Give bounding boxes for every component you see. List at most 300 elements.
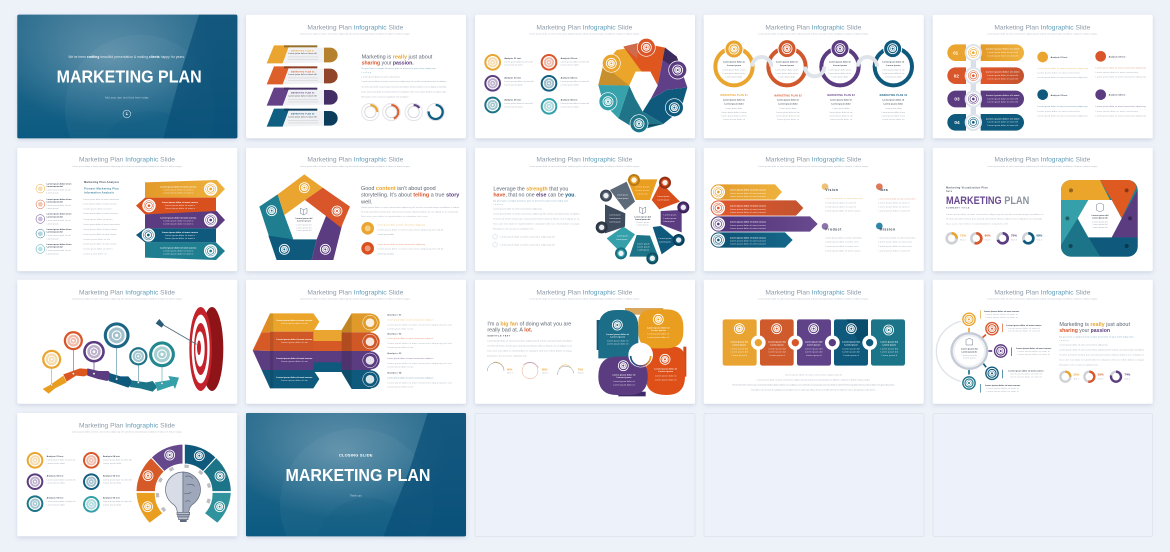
progress rings xyxy=(362,103,444,121)
slide 13 subtitle: Lorem ipsum dolor sit amet consectetur adipiscing elit sed do eiusmod tempor incididunt ut labore et dolore magna xyxy=(529,298,640,301)
slide 12 text list: Lorem ipsum dolor sit am xyxy=(387,327,414,330)
plan captions: Lorem ipsum dolor sit xyxy=(830,99,852,102)
pill 02: Lorem ipsum dolor sit amet elit xyxy=(987,74,1018,77)
slide 2 text block: Duis aute irure dolor in reprehenderit in voluptate velit esse cillum dolore eu fugiat nulla xyxy=(362,90,447,93)
slide 2 text block: Ut enim ad minim veniam quis nostrud exercitation ullamco laboris nisi ut aliquip commodo xyxy=(362,85,447,88)
pill 02: Lorem ipsum dolor sit amet elit xyxy=(987,77,1018,80)
slide 8 body: Ut enim ad minim veniam quis nostrud exercitation ullamco laboris nisi ut aliquip ex ea xyxy=(493,217,580,220)
ribbon 2 xyxy=(267,66,338,84)
pill 02: Lorem ipsum dolor sit amet xyxy=(986,71,1020,74)
middle text column: Marketing Plan Analysis xyxy=(84,180,120,184)
slide 13 body: Duis aute irure dolor in reprehenderit in voluptate velit esse cillum dolore eu fugiat xyxy=(487,349,572,352)
middle text column: Lorem ipsum dolor sit amet e xyxy=(83,247,113,250)
radial diagram xyxy=(936,312,1008,391)
slide 7 body: Duis aute irure dolor in reprehenderit in voluptate velit esse xyxy=(361,215,428,218)
plan captions: Lorem ipsum dolor sit amet xyxy=(721,115,747,118)
stacked arrows: Lorem ipsum dolor sit amet consec xyxy=(160,186,197,189)
slide 15 body: Lorem ipsum dolor sit amet consectetur adipiscing elit sed do eiusmod tempor incididunt xyxy=(1059,348,1144,351)
donut labels: Text 4 xyxy=(1036,238,1043,241)
donut labels: 68% xyxy=(1036,234,1043,238)
middle text column: Lorem ipsum dolor sit amet consec xyxy=(83,228,117,231)
plan captions: Lorem ipsum dolor sit am xyxy=(882,111,905,114)
ring inner text: Lorem ipsum dolor sit am xyxy=(723,69,746,72)
segmented wheel diagram: Lorem ipsum xyxy=(664,217,677,220)
left icon list: Lorem ipsum dolor sit am xyxy=(47,204,71,207)
segmented wheel diagram: Lorem ipsum xyxy=(636,221,650,224)
analysis items: Lorem ipsum dolor sit amet consectetur adipiscing xyxy=(1096,75,1146,78)
stacked arrows xyxy=(136,180,225,260)
slide 15 body: today xyxy=(1059,339,1070,342)
analysis list: Lorem ipsum dolor xyxy=(561,64,579,67)
vision, idea, product, mission: Lorem ipsum dolor sit amet cons xyxy=(825,245,859,248)
cards: Lorem ipsum xyxy=(883,344,896,346)
segmented wheel diagram: Lorem ip xyxy=(637,192,648,195)
slide 14: five cards xyxy=(704,280,924,404)
stacked arrows: Lorem ipsum dolor sit amet e xyxy=(163,189,194,192)
analysis list: Analysis 05 text xyxy=(103,475,120,478)
donut labels: Text 1 xyxy=(960,238,966,241)
plan captions: Lorem ipsum dolor sit am xyxy=(829,115,853,118)
cards: Lorem ipsum d xyxy=(882,354,898,357)
quad blobs: Lorem ipsum dolor sit xyxy=(607,343,629,346)
middle text column: Lorem ipsum dolor sit amet consectetur xyxy=(83,198,120,201)
plan captions: Lorem ipsum dolor sit xyxy=(777,99,799,102)
arrows: Lorem ipsum dolor sit amet consect xyxy=(730,243,766,246)
slide 13 body: Ut enim ad minim veniam quis nostrud exercitation ullamco laboris nisi ut aliquip ex ea xyxy=(487,344,573,347)
centered paragraph: Ut enim ad minim veniam quis nostrud exercitation ullamco laboris nisi ut aliquip ex ea commodo consequat duis aute irure dolor in reprehenderit in voluptate velit esse cillum dolore eu fugiat nulla pariatur xyxy=(732,383,895,386)
plan captions: MARKETING PLAN 04 xyxy=(880,94,908,97)
left icon list: Lorem ipsum xyxy=(47,237,59,240)
ribbon 4: Lorem ipsum dolor sit amet elit xyxy=(288,115,317,118)
slide 8 heading: have, that no one else can be you. xyxy=(493,192,576,198)
middle text column: Pioneer Marketing Plan xyxy=(84,186,119,190)
slide 2 heading line 2: sharing your passion. xyxy=(362,60,414,66)
cards: Lorem ipsum dol xyxy=(842,342,860,344)
plan captions: Lorem ipsum dolor sit xyxy=(723,118,745,121)
vision, idea, product, mission: Lorem ipsum dolor sit amet el xyxy=(879,210,911,213)
cards: Lorem ipsum d xyxy=(843,354,859,357)
radial diagram: Lorem ipsum do xyxy=(962,354,978,357)
rounded hexagon diagram: Lorem ipsum do xyxy=(1092,218,1108,220)
plan captions: Lorem ipsum dolor sit xyxy=(830,118,852,121)
arrows: Lorem ipsum dolor sit amet consect xyxy=(730,208,766,211)
segmented wheel diagram: Lorem ipsum xyxy=(657,198,670,201)
stacked arrows: Lorem ipsum dolor sit amet consec xyxy=(162,201,199,204)
ribbon 3 xyxy=(267,88,338,106)
slide 15 heading xyxy=(1059,322,1130,334)
segmented wheel diagram xyxy=(597,175,688,263)
pinwheel diagram xyxy=(598,38,687,133)
ribbon 3: Lorem ipsum dolor sit amet elit xyxy=(288,94,317,97)
cards: Lorem ipsum dol xyxy=(842,351,860,354)
slide 12 text list: Analysis 04 xyxy=(387,372,402,375)
slide 13 heading: I'm a big fan of doing what you are xyxy=(487,322,571,328)
rounded hexagon diagram xyxy=(1061,180,1138,257)
bullseye target xyxy=(189,307,223,391)
cards: Lorem ipsum d xyxy=(769,354,785,357)
slide 15 donuts: Text 2 xyxy=(1098,377,1104,380)
slide 8 bullets: Lorem ipsum dolor sit amet consectetur adipiscing elit xyxy=(501,235,555,238)
vision, idea, product, mission: Lorem ipsum dolor sit amet el xyxy=(879,249,911,252)
gear segments xyxy=(136,444,231,523)
left icon list: Lorem ipsum dolor sit am xyxy=(47,213,71,216)
slide 11: arrow path and target xyxy=(17,280,237,404)
arrows: Lorem ipsum dolor sit amet consect xyxy=(730,195,766,198)
pill 04: 04 xyxy=(954,120,960,125)
slide 12 text list: Lorem ipsum dolor sit amet consectetur adipiscin xyxy=(387,318,434,321)
donut labels: Text 3 xyxy=(1011,238,1017,241)
slide 12 text list: Lorem ipsum dolor sit am xyxy=(387,346,414,349)
pill 04: Lorem ipsum dolor sit amet xyxy=(986,117,1020,120)
left icon list: Lorem ipsum xyxy=(47,252,59,255)
left icon list: Lorem ipsum dolor sit am xyxy=(47,219,71,222)
slide 11 title: Marketing Plan Infographic Slide xyxy=(79,289,175,296)
cards: Lorem ipsum dol xyxy=(731,342,748,344)
segmented wheel diagram: Lorem ipsum xyxy=(659,240,671,243)
vision, idea, product, mission: Lorem ipsum dolor sit amet el xyxy=(879,202,910,205)
slide 16 subtitle: Lorem ipsum dolor sit amet consectetur adipiscing elit sed do eiusmod tempor incididunt ut labore et dolore magna xyxy=(72,431,183,434)
ribbon 2: MARKETING PLAN 02 xyxy=(291,70,314,73)
middle text column: Lorem ipsum dolor sit amet consect xyxy=(83,203,117,206)
segmented wheel diagram: Lorem ipsum xyxy=(637,246,650,249)
plan captions: Lorem ipsum dolor sit am xyxy=(776,111,800,114)
plan captions: Lorem ipsum dolor xyxy=(831,104,851,106)
left icon list: Lorem ipsum dolor sit am xyxy=(47,188,71,191)
slide 13 body xyxy=(487,339,573,357)
analysis list: Lorem ipsum dolor sit amet elit xyxy=(103,500,132,503)
slide 15 body: Do you have a unique business plan to present to your team today now xyxy=(1059,335,1134,338)
left block: Lorem ipsum dolor sit amet consec xyxy=(276,319,313,322)
dart arrow xyxy=(156,319,197,344)
donut labels xyxy=(960,234,1043,241)
slide 7 callouts: Lorem ipsum dolor sit amet consectetur adipiscing elit sed do xyxy=(377,248,444,251)
analysis items: Analysis 03 text xyxy=(1051,94,1068,97)
vision, idea, product, mission: Lorem ipsum dolor sit amet consectetu xyxy=(825,237,863,240)
node labels: Lorem ipsum dolor sit amet el xyxy=(1008,330,1041,333)
slide 12 text list: Lorem ipsum dolor sit amet consectetur adipiscin xyxy=(387,377,434,380)
quad blobs: Lorem ipsum dolor sit xyxy=(647,326,670,329)
slide 12 text list: Lorem ipsum dolor sit amet consectetur adipiscing elit sed xyxy=(387,382,452,385)
pill 03: Lorem ipsum dolor sit amet xyxy=(986,94,1020,97)
analysis list: Lorem ipsum dolor sit amet elit xyxy=(504,102,533,105)
left icon list: Lorem ipsum dol xyxy=(47,186,63,188)
arrows: Lorem ipsum dolor sit amet consec xyxy=(730,205,767,208)
left icon list: Lorem ipsum dolor sit am xyxy=(47,234,71,237)
slide 6: arrow stack xyxy=(17,148,237,271)
slide 7 callouts xyxy=(361,222,444,255)
ribbon 1 xyxy=(267,45,338,63)
quad blobs: Lorem ipsum dolor sit xyxy=(648,333,669,336)
analysis list: Lorem ipsum dolor sit amet elit xyxy=(47,500,76,503)
vision, idea, product, mission: Lorem ipsum dolor sit amet cons xyxy=(825,241,859,244)
slide 15 body: Duis aute irure dolor in reprehenderit in voluptate velit esse cillum dolore eu fugiat xyxy=(1059,358,1144,361)
cards: Lorem ipsum xyxy=(733,344,746,346)
centered paragraph: Excepteur sint occaecat cupidatat non proident sunt in culpa qui officia deserunt mollit anim id est laborum sed ut perspiciatis unde omnis xyxy=(751,388,875,391)
slide 7 body xyxy=(361,206,460,218)
slide 12: arrow blocks xyxy=(246,280,466,404)
closing eyebrow: CLOSING SLIDE xyxy=(339,453,373,458)
arrows: Lorem ipsum dolor sit amet consect xyxy=(730,240,766,243)
analysis list: Lorem ipsum dolor xyxy=(504,83,523,86)
left block: Lorem ipsum dolor sit amet consec xyxy=(276,376,313,379)
analysis list: Analysis 01 text xyxy=(47,455,64,458)
analysis items: Analysis 02 text xyxy=(1109,56,1126,59)
slide 15 donuts: Text 1 xyxy=(1073,377,1080,380)
plan captions: Lorem ipsum dolor sit am xyxy=(829,111,853,114)
analysis list: Lorem ipsum dolor xyxy=(561,83,579,86)
stacked arrows: Lorem ipsum dolor sit amet e xyxy=(163,192,194,195)
slide 7 callouts: Lorem ipsum dolor sit amet consectetur adipiscing xyxy=(377,224,426,227)
ring inner text xyxy=(723,61,905,78)
analysis list: Lorem ipsum dolor xyxy=(47,482,65,485)
ribbon 4 xyxy=(267,109,338,127)
gear targets xyxy=(143,450,225,512)
quad blobs: Lorem ipsum xyxy=(610,337,625,339)
plan captions: Lorem ipsum dolor xyxy=(726,107,743,110)
ring inner text: Lorem ipsum dolor sit xyxy=(829,61,851,64)
slide 12 text list: Lorem ipsum dolor sit amet consectetur adipiscing elit sed xyxy=(387,323,452,326)
slide 5 subtitle: Lorem ipsum dolor sit amet consectetur adipiscing elit sed do eiusmod tempor incididunt ut labore et dolore magna xyxy=(987,32,1098,35)
left icon list: Lorem ipsum dolor sit am xyxy=(47,182,71,185)
node labels: Lorem ipsum dolor sit amet el xyxy=(986,316,1018,319)
ring inner text: Lorem ipsum dolor sit xyxy=(776,61,798,64)
segmented wheel diagram: Lorem ipsum xyxy=(663,220,675,223)
vision, idea, product, mission: Lorem ipsum dolor sit amet consectetu xyxy=(825,197,863,200)
slide 2 heading: Marketing is really just about xyxy=(362,55,433,61)
slide 7 heading: well. xyxy=(360,199,373,205)
quad blobs: Lorem ipsum dolor sit xyxy=(648,336,669,339)
analysis list: Lorem ipsum dolor xyxy=(103,482,122,485)
slide 15 body: Excepteur sint occaecat cupidatat non xyxy=(1059,363,1099,366)
slide 8 bullets xyxy=(493,234,555,247)
arrows: Lorem ipsum dolor sit amet consect xyxy=(730,192,766,195)
slide 7 callouts: Lorem ipsum dolor xyxy=(377,233,394,236)
pill 04 xyxy=(947,114,1024,131)
middle text column: Lorem ipsum dolor sit amet xyxy=(83,207,112,210)
arrows: Lorem ipsum dolor sit amet consect xyxy=(730,211,766,214)
analysis items: Analysis 01 text xyxy=(1051,56,1068,59)
ring inner text: Lorem ipsum dolor sit am xyxy=(829,72,852,75)
slide 7 heading: Good content isn't about good xyxy=(361,186,436,192)
quad blobs: Lorem ipsum dolor sit xyxy=(654,367,677,370)
slide 6 subtitle: Lorem ipsum dolor sit amet consectetur adipiscing elit sed do eiusmod tempor incididunt ut labore et dolore magna xyxy=(72,165,183,168)
left block: Lorem ipsum dolor sit amet consec xyxy=(276,338,313,341)
left icon list xyxy=(36,182,71,255)
middle text column: Lorem ipsum dolor sit amet e xyxy=(83,218,113,221)
pill 02 xyxy=(947,67,1024,84)
slide 10 heading: SUMMARY TITLE xyxy=(946,207,970,210)
ribbon 4: MARKETING PLAN 04 xyxy=(291,113,314,116)
slide 10 title: Marketing Plan Infographic Slide xyxy=(994,157,1091,164)
segmented wheel diagram: Lorem ipsum dol xyxy=(634,216,651,218)
middle text column: Lorem ipsum dolor sit xyxy=(83,252,107,255)
stacked arrows: Lorem ipsum dolor sit amet e xyxy=(163,220,194,223)
cards: Lorem ipsum dol xyxy=(881,347,899,350)
segmented wheel diagram: Lorem ipsum xyxy=(617,235,629,238)
plan captions: MARKETING PLAN 02 xyxy=(774,94,802,97)
vision, idea, product, mission: Lorem ipsum dolor sit amet cons xyxy=(879,245,912,248)
slide 2 text block: Lorem ipsum dolor sit amet consectetur xyxy=(362,75,400,78)
ribbon 1: MARKETING PLAN 01 xyxy=(291,49,314,52)
analysis list: Lorem ipsum dolor sit amet elit xyxy=(47,478,76,481)
pill 01: Lorem ipsum dolor sit amet elit xyxy=(987,51,1018,54)
central bands xyxy=(312,330,343,372)
segmented wheel diagram: Lorem ipsum xyxy=(635,189,650,192)
quad blobs: Lorem ipsum dolor sit xyxy=(655,375,677,378)
quad blobs: Lorem ipsum dolor sit xyxy=(655,378,677,381)
radial diagram: Lorem ipsum do xyxy=(962,351,978,353)
slide 15 donuts: Text 3 xyxy=(1124,377,1131,380)
slide 15 donuts: 25% xyxy=(1073,372,1080,376)
quad blobs: Lorem ipsum dolor sit xyxy=(606,333,629,336)
ring inner text: Lorem ipsum dolor xyxy=(832,75,849,78)
donut labels: 60% xyxy=(985,234,991,238)
pill 04: Lorem ipsum dolor sit amet elit xyxy=(987,124,1018,127)
left block: Lorem ipsum dolor sit am xyxy=(281,322,308,325)
slide 13 heading xyxy=(487,322,571,337)
slide 10 heading: here xyxy=(946,191,953,193)
slide 12 text list: Lorem ipsum dolor sit amet consectetur adipiscing elit sed xyxy=(387,342,452,345)
ribbon 2: Lorem ipsum dolor sit amet elit xyxy=(288,73,317,76)
slide 8 subtitle: Lorem ipsum dolor sit amet consectetur adipiscing elit sed do eiusmod tempor incididunt ut labore et dolore magna xyxy=(529,165,640,168)
plan captions: Lorem ipsum dolor xyxy=(780,107,797,110)
slide 8 body xyxy=(493,200,580,230)
middle text column xyxy=(83,180,120,255)
ring inner text: Lorem ipsum dolor sit am xyxy=(776,69,799,72)
vision, idea, product, mission: Lorem ipsum dolor sit amet el xyxy=(879,206,910,209)
slide 16: gear and lightbulb xyxy=(17,413,237,536)
plan captions: Lorem ipsum dolor xyxy=(885,107,902,110)
analysis list: Lorem ipsum dolor xyxy=(103,504,122,507)
slide 2 subtitle: Lorem ipsum dolor sit amet consectetur adipiscing elit sed do eiusmod tempor incididunt ut labore et dolore magna xyxy=(300,32,411,35)
slide 13 body: Lorem ipsum dolor sit amet consectetur adipiscing elit sed do eiusmod tempor incididunt xyxy=(487,339,572,342)
cards: Lorem ipsum xyxy=(844,344,858,346)
node labels: Lorem ipsum dolor sit amet consec xyxy=(1006,324,1042,327)
node labels: Lorem ipsum dolor sit amet consec xyxy=(1008,369,1044,372)
segmented wheel diagram: Lorem ipsum xyxy=(609,214,621,217)
ring inner text: Lorem ipsum dolor sit xyxy=(882,61,904,64)
pill 01: 01 xyxy=(953,50,959,55)
slide 12 subtitle: Lorem ipsum dolor sit amet consectetur adipiscing elit sed do eiusmod tempor incididunt ut labore et dolore magna xyxy=(300,298,411,301)
ring inner text: Lorem ipsum xyxy=(780,65,794,67)
analysis items: Lorem ipsum dolor sit amet consectetur xyxy=(1096,110,1139,113)
slide 8 title: Marketing Plan Infographic Slide xyxy=(536,157,633,164)
slide 3 subtitle: Lorem ipsum dolor sit amet consectetur adipiscing elit sed do eiusmod tempor incididunt ut labore et dolore magna xyxy=(529,32,640,35)
stacked arrows: Lorem ipsum dolor sit amet consec xyxy=(162,231,199,234)
plan captions: Lorem ipsum dolor xyxy=(884,104,903,106)
analysis list xyxy=(484,54,589,115)
plan captions: Lorem ipsum dolor xyxy=(833,107,850,110)
analysis list: Lorem ipsum dolor xyxy=(561,105,579,108)
slide 12 text list: Lorem ipsum dolor sit am xyxy=(387,386,414,389)
slide 7: pentagon xyxy=(246,148,466,271)
vision, idea, product, mission xyxy=(822,183,916,252)
slide 12 text list: Lorem ipsum dolor sit amet consectetur adipiscin xyxy=(387,337,434,340)
stacked arrows: Lorem ipsum dolor sit amet consec xyxy=(160,217,197,220)
ring inner text: Lorem ipsum xyxy=(727,65,741,67)
slide 7 callouts: Lorem ipsum dolor xyxy=(377,252,394,255)
ring inner text: Lorem ipsum xyxy=(833,65,847,67)
cards: Lorem ipsum xyxy=(807,344,820,346)
ribbon 1: Lorem ipsum dolor sit amet elit xyxy=(288,52,317,55)
segmented wheel diagram: Lorem ipsum xyxy=(617,197,629,200)
gauges: 70% xyxy=(578,367,584,371)
rings chain xyxy=(715,40,912,85)
slide 15 subtitle: Lorem ipsum dolor sit amet consectetur adipiscing elit sed do eiusmod tempor incididunt ut labore et dolore magna xyxy=(987,298,1098,301)
cards: Lorem ipsum dol xyxy=(731,351,749,354)
slide 12 text list: Analysis 02 xyxy=(387,332,402,335)
milestones xyxy=(42,322,175,386)
slide 8: segmented wheel xyxy=(475,148,695,271)
analysis list: Lorem ipsum dolor xyxy=(504,64,523,67)
analysis list: Analysis 02 text xyxy=(47,475,64,478)
cards: Lorem ipsum dol xyxy=(881,342,898,344)
vision, idea, product, mission: Lorem ipsum dolor sit amet consec xyxy=(825,249,861,252)
node labels: Lorem ipsum dolor sit amet el xyxy=(986,313,1018,316)
quad blobs: Lorem ipsum xyxy=(617,377,631,379)
stacked arrows: Lorem ipsum dolor sit amet e xyxy=(165,234,196,237)
plan captions: Lorem ipsum dolor sit xyxy=(777,118,799,121)
centered paragraph: Lorem ipsum dolor sit amet consectetur adipiscing elit xyxy=(785,373,842,376)
slide 15 donuts: 50% xyxy=(1098,372,1104,376)
slide 16 title: Marketing Plan Infographic Slide xyxy=(79,422,175,429)
analysis list: Lorem ipsum dolor xyxy=(103,462,122,465)
node labels: Lorem ipsum dolor sit amet consec xyxy=(984,310,1020,313)
plan captions: Lorem ipsum dolor sit xyxy=(882,99,904,102)
analysis list: Analysis 04 text xyxy=(561,76,578,79)
vision, idea, product, mission: Product xyxy=(825,227,842,231)
slide 12 text list: Lorem ipsum dolor sit amet consectetur adipiscin xyxy=(387,357,434,360)
slide 7 heading: storytelling. It's about telling a true story xyxy=(361,193,460,199)
left block xyxy=(253,313,319,388)
slide 12 text list: Lorem ipsum dolor sit amet consectetur adipiscing elit sed xyxy=(387,362,452,365)
analysis items: Lorem ipsum dolor sit amet consectetur adipiscing xyxy=(1037,105,1088,108)
cards: Lorem ipsum d xyxy=(806,354,822,357)
empty slide placeholders xyxy=(475,414,1152,536)
slide 7 heading xyxy=(360,186,460,205)
analysis list: Lorem ipsum dolor sit amet elit xyxy=(561,60,589,63)
left icon list: Lorem ipsum dolor sit am xyxy=(47,198,71,201)
quad blobs xyxy=(597,308,686,396)
rounded hexagon diagram: Lorem ipsum dol xyxy=(1092,215,1109,217)
slide 1: cover xyxy=(16,14,238,141)
slide 8 body: today xyxy=(493,203,504,206)
left icon list: Lorem ipsum xyxy=(47,207,59,210)
segmented wheel diagram: Lorem ipsum xyxy=(609,220,621,223)
gauges: Text 3 xyxy=(578,372,584,375)
segmented wheel diagram: Lorem ipsum do xyxy=(635,219,651,221)
radial diagram: Lorem ipsum xyxy=(963,357,976,360)
slide 12 text list: Analysis 01 xyxy=(387,314,402,317)
left block: Lorem ipsum dolor sit amet consec xyxy=(276,357,313,360)
quad blobs: Lorem ipsum dolor sit xyxy=(607,339,629,342)
ring inner text: Lorem ipsum dolor sit am xyxy=(776,72,799,75)
analysis list: Lorem ipsum dolor xyxy=(47,504,65,507)
cards xyxy=(723,319,905,366)
vision, idea, product, mission: Lorem ipsum dolor sit amet consec xyxy=(825,210,861,213)
slide 15 body xyxy=(1059,335,1145,366)
closing note: Thank you xyxy=(350,495,362,497)
slide 17: closing xyxy=(244,413,468,539)
icon: bulb brain xyxy=(166,472,200,522)
analysis list: Analysis 01 text xyxy=(504,57,521,60)
left block: Lorem ipsum dolor sit am xyxy=(281,379,308,382)
slide 8 body: Excepteur sint occaecat cupidatat non xyxy=(493,227,534,230)
plan captions xyxy=(720,94,908,121)
cards: Lorem ipsum dol xyxy=(881,351,899,354)
analysis list: Analysis 06 text xyxy=(561,98,578,101)
gear teeth xyxy=(157,466,210,511)
